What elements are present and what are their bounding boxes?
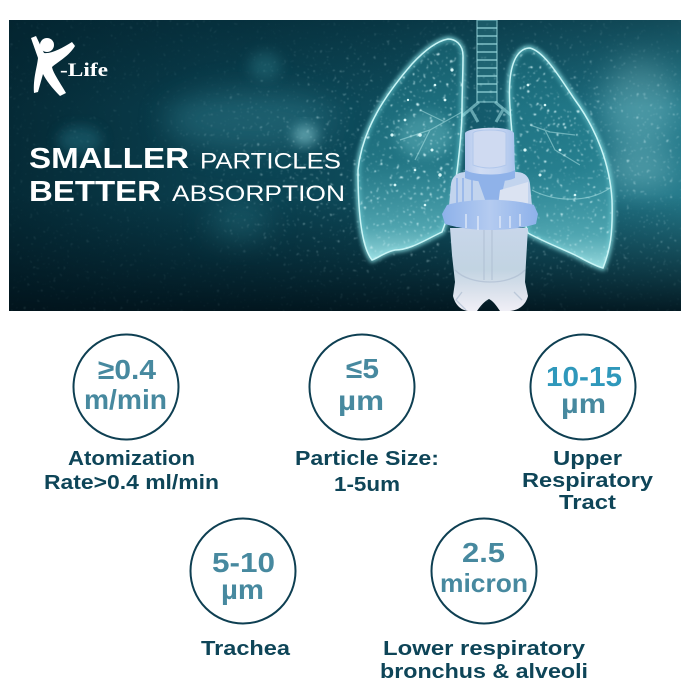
nebulizer ring bbox=[442, 200, 538, 230]
nebulizer mouthpiece bbox=[465, 128, 515, 174]
stat: trachea: µm bbox=[221, 574, 264, 605]
stat: particle size: Particle Size: bbox=[295, 447, 439, 470]
stat: trachea: Trachea bbox=[201, 637, 291, 660]
lung branches bbox=[400, 110, 610, 199]
title bbox=[30, 148, 343, 201]
logo: K-Life: -Life bbox=[60, 60, 108, 81]
stat: atomization rate: Atomization bbox=[68, 447, 195, 470]
nebulizer cup bbox=[450, 228, 528, 311]
stat: atomization rate: m/min bbox=[84, 384, 167, 415]
lung cloud bbox=[397, 113, 453, 157]
title: PARTICLES bbox=[200, 148, 341, 174]
stat: upper respiratory tract: Respiratory bbox=[522, 469, 654, 492]
stat: trachea: 5-10 bbox=[212, 547, 275, 578]
stat: particle size: 1-5um bbox=[334, 473, 400, 496]
stat: trachea bbox=[190, 518, 296, 660]
stat: lower respiratory bbox=[380, 518, 588, 683]
icon: lungs bbox=[350, 20, 620, 270]
lung speckle bbox=[358, 43, 612, 262]
nebulizer cap bbox=[449, 172, 532, 206]
stat: atomization rate: ≥0.4 bbox=[98, 354, 156, 385]
icon: nebulizer bbox=[442, 128, 538, 311]
left lung bbox=[358, 39, 463, 260]
stat: lower respiratory: Lower respiratory bbox=[383, 637, 586, 660]
stat: upper respiratory tract bbox=[522, 334, 654, 514]
stat: upper respiratory tract: 10-15 bbox=[546, 361, 622, 392]
stat: upper respiratory tract: µm bbox=[561, 388, 606, 419]
panel: banner bbox=[9, 20, 681, 311]
logo: K-Life bbox=[31, 36, 108, 96]
stat: atomization rate bbox=[44, 334, 219, 494]
title: SMALLER bbox=[29, 143, 189, 175]
stat: lower respiratory: bronchus & alveoli bbox=[380, 660, 588, 683]
stat: lower respiratory: micron bbox=[440, 568, 528, 598]
stat: upper respiratory tract: Upper bbox=[553, 447, 622, 470]
trachea bbox=[462, 20, 512, 122]
stat: atomization rate: Rate>0.4 ml/min bbox=[44, 471, 219, 494]
lung sparkles bbox=[390, 68, 576, 206]
stat: lower respiratory: 2.5 bbox=[462, 537, 505, 568]
title: BETTER bbox=[29, 176, 161, 208]
stat: particle size bbox=[295, 334, 439, 496]
title: ABSORPTION bbox=[172, 181, 345, 206]
stat: upper respiratory tract: Tract bbox=[559, 491, 616, 514]
lung glow bbox=[358, 39, 612, 268]
right lung bbox=[509, 48, 612, 268]
stat: particle size: ≤5 bbox=[346, 353, 379, 384]
stat: particle size: µm bbox=[338, 385, 384, 416]
